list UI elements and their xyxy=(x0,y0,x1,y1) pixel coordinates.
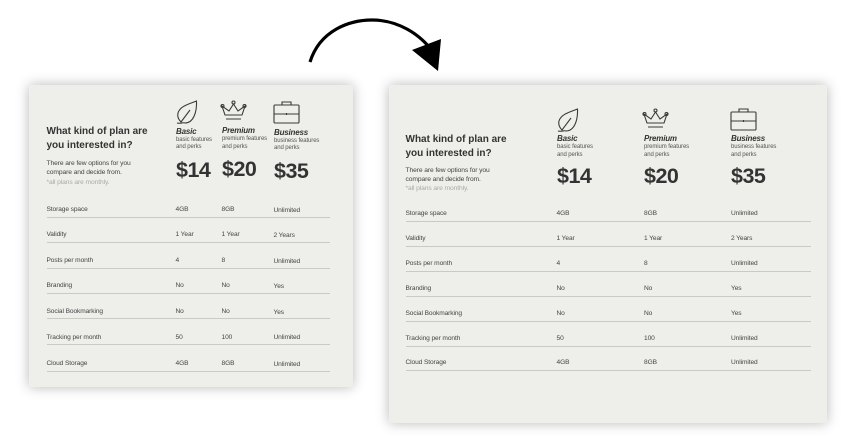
row: small tracking: Unlimited xyxy=(274,334,300,341)
heading: small table: you interested in? xyxy=(46,140,133,151)
row: large cloud xyxy=(406,358,811,371)
price: large premium: $20 xyxy=(644,164,678,188)
row: small branding: No xyxy=(176,282,184,289)
row: large branding: No xyxy=(556,284,565,292)
row: large posts xyxy=(406,260,811,272)
plan: large business xyxy=(731,134,776,158)
row: small branding: Yes xyxy=(274,283,284,290)
plan: large business: Business xyxy=(731,134,765,143)
row: small storage xyxy=(46,206,330,218)
row: large validity: 1 Year xyxy=(556,234,575,242)
row: large storage: 8GB xyxy=(644,210,657,216)
price: small basic: $14 xyxy=(176,158,210,182)
row: small social xyxy=(46,308,330,319)
row: small tracking: Tracking per month xyxy=(46,334,101,341)
row: large cloud: Cloud Storage xyxy=(406,358,446,366)
row: small storage: 8GB xyxy=(222,206,234,213)
row: large storage: 4GB xyxy=(556,210,569,216)
text block: small intro: compare and decide from. xyxy=(46,169,122,176)
row: small posts: Posts per month xyxy=(46,257,93,264)
row: large social xyxy=(406,310,811,322)
arrow xyxy=(308,18,441,71)
row: small posts: 4 xyxy=(176,257,179,264)
row: small branding xyxy=(46,282,330,294)
row: large tracking: 50 xyxy=(556,334,564,342)
row: large tracking: Tracking per month xyxy=(406,334,460,342)
plan: small business xyxy=(274,128,320,151)
row: large validity: 2 Years xyxy=(731,234,752,242)
plan: small basic: and perks xyxy=(176,144,201,150)
plan: large business: and perks xyxy=(731,152,756,158)
row: small cloud: Cloud Storage xyxy=(46,360,87,367)
plan: large premium: premium features xyxy=(644,144,689,150)
icon: crown xyxy=(642,108,668,128)
row: large posts: 4 xyxy=(556,260,560,266)
row: large branding: Yes xyxy=(731,284,741,292)
heading: small table: What kind of plan are xyxy=(46,126,148,137)
row: small cloud xyxy=(46,360,330,372)
text block: large intro xyxy=(406,166,490,192)
row: small social: Social Bookmarking xyxy=(46,308,103,315)
plan: large basic: basic features xyxy=(557,144,593,150)
plan: small premium: premium features xyxy=(222,136,267,142)
icon: briefcase xyxy=(730,108,757,130)
row: large storage: Unlimited xyxy=(731,210,758,216)
text block: small intro: There are few options for you xyxy=(46,160,131,167)
heading: small table xyxy=(46,126,148,151)
row: small posts xyxy=(46,257,330,269)
row: small storage: Storage space xyxy=(46,206,88,213)
row: large social: No xyxy=(556,310,565,316)
row: small validity: 1 Year xyxy=(222,231,240,238)
row: large posts: Unlimited xyxy=(731,260,758,266)
plan: large premium xyxy=(644,134,689,158)
icon: briefcase xyxy=(273,102,300,124)
plan: small premium: and perks xyxy=(222,144,247,150)
text block: large intro: There are few options for you xyxy=(406,166,490,174)
row: large storage xyxy=(406,210,811,222)
plan: large basic: Basic xyxy=(557,134,577,143)
row: small validity xyxy=(46,231,330,243)
row: large branding: No xyxy=(644,284,652,292)
row: small storage: 4GB xyxy=(176,206,188,213)
icon: crown xyxy=(220,100,246,120)
row: large branding xyxy=(406,284,811,297)
row: small cloud: 8GB xyxy=(222,360,234,367)
row: small social: Yes xyxy=(274,309,284,316)
row: large social: Social Bookmarking xyxy=(406,310,462,316)
row: small social: No xyxy=(222,308,230,315)
icon: leaf xyxy=(176,100,198,124)
row: large cloud: 8GB xyxy=(644,358,657,366)
plan: small basic: basic features xyxy=(176,136,212,142)
heading: large table: What kind of plan are xyxy=(406,134,507,144)
row: large posts: 8 xyxy=(644,260,648,266)
heading: large table: you interested in? xyxy=(406,148,492,158)
plan: small basic: Basic xyxy=(176,126,196,136)
row: small posts: Unlimited xyxy=(274,258,300,265)
row: small storage: Unlimited xyxy=(274,207,300,214)
plan: large basic: and perks xyxy=(557,152,582,158)
text block: small intro xyxy=(46,160,131,186)
heading: large table xyxy=(406,134,507,158)
row: large storage: Storage space xyxy=(406,210,447,216)
plan: large business: business features xyxy=(731,144,776,150)
row: large posts: Posts per month xyxy=(406,260,452,266)
row: large validity: Validity xyxy=(406,234,425,242)
row: large cloud: 4GB xyxy=(556,358,569,366)
row: large validity: 1 Year xyxy=(644,234,662,242)
row: large tracking xyxy=(406,334,811,347)
row: large tracking: 100 xyxy=(644,334,655,342)
row: small cloud: 4GB xyxy=(176,360,188,367)
row: small tracking: 100 xyxy=(222,334,232,341)
plan: small basic xyxy=(176,126,212,150)
plan: small business: and perks xyxy=(274,145,299,151)
price: large business: $35 xyxy=(731,164,765,188)
row: large social: No xyxy=(644,310,652,316)
row: large cloud: Unlimited xyxy=(731,358,758,366)
plan: large basic xyxy=(557,134,593,158)
row: small tracking xyxy=(46,334,330,345)
plan: small business: Business xyxy=(274,128,308,136)
price: large basic: $14 xyxy=(557,164,591,188)
panel: large plan table xyxy=(389,85,827,423)
row: large social: Yes xyxy=(731,310,741,316)
row: small validity: 2 Years xyxy=(274,232,295,239)
row: large validity xyxy=(406,234,811,247)
row: small branding: No xyxy=(222,282,230,289)
text block: large intro: *all plans are monthly. xyxy=(406,185,468,192)
text block: small intro: *all plans are monthly. xyxy=(46,179,110,186)
plan: small business: business features xyxy=(274,138,319,144)
row: small branding: Branding xyxy=(46,282,72,289)
row: small tracking: 50 xyxy=(176,334,183,341)
icon: leaf xyxy=(558,108,578,132)
row: small validity: Validity xyxy=(46,231,66,238)
plan: large premium: and perks xyxy=(644,152,669,158)
row: small validity: 1 Year xyxy=(176,231,194,238)
plan: small premium xyxy=(222,126,267,150)
text block: large intro: compare and decide from. xyxy=(406,176,481,183)
price: small premium: $20 xyxy=(222,157,256,181)
plan: small premium: Premium xyxy=(222,126,255,135)
row: small posts: 8 xyxy=(222,257,225,264)
row: large tracking: Unlimited xyxy=(731,334,758,342)
row: small cloud: Unlimited xyxy=(274,361,300,368)
price: small business: $35 xyxy=(274,159,308,183)
row: small social: No xyxy=(176,308,184,315)
panel: small plan table xyxy=(29,85,353,387)
row: large branding: Branding xyxy=(406,284,431,292)
plan: large premium: Premium xyxy=(644,134,677,143)
